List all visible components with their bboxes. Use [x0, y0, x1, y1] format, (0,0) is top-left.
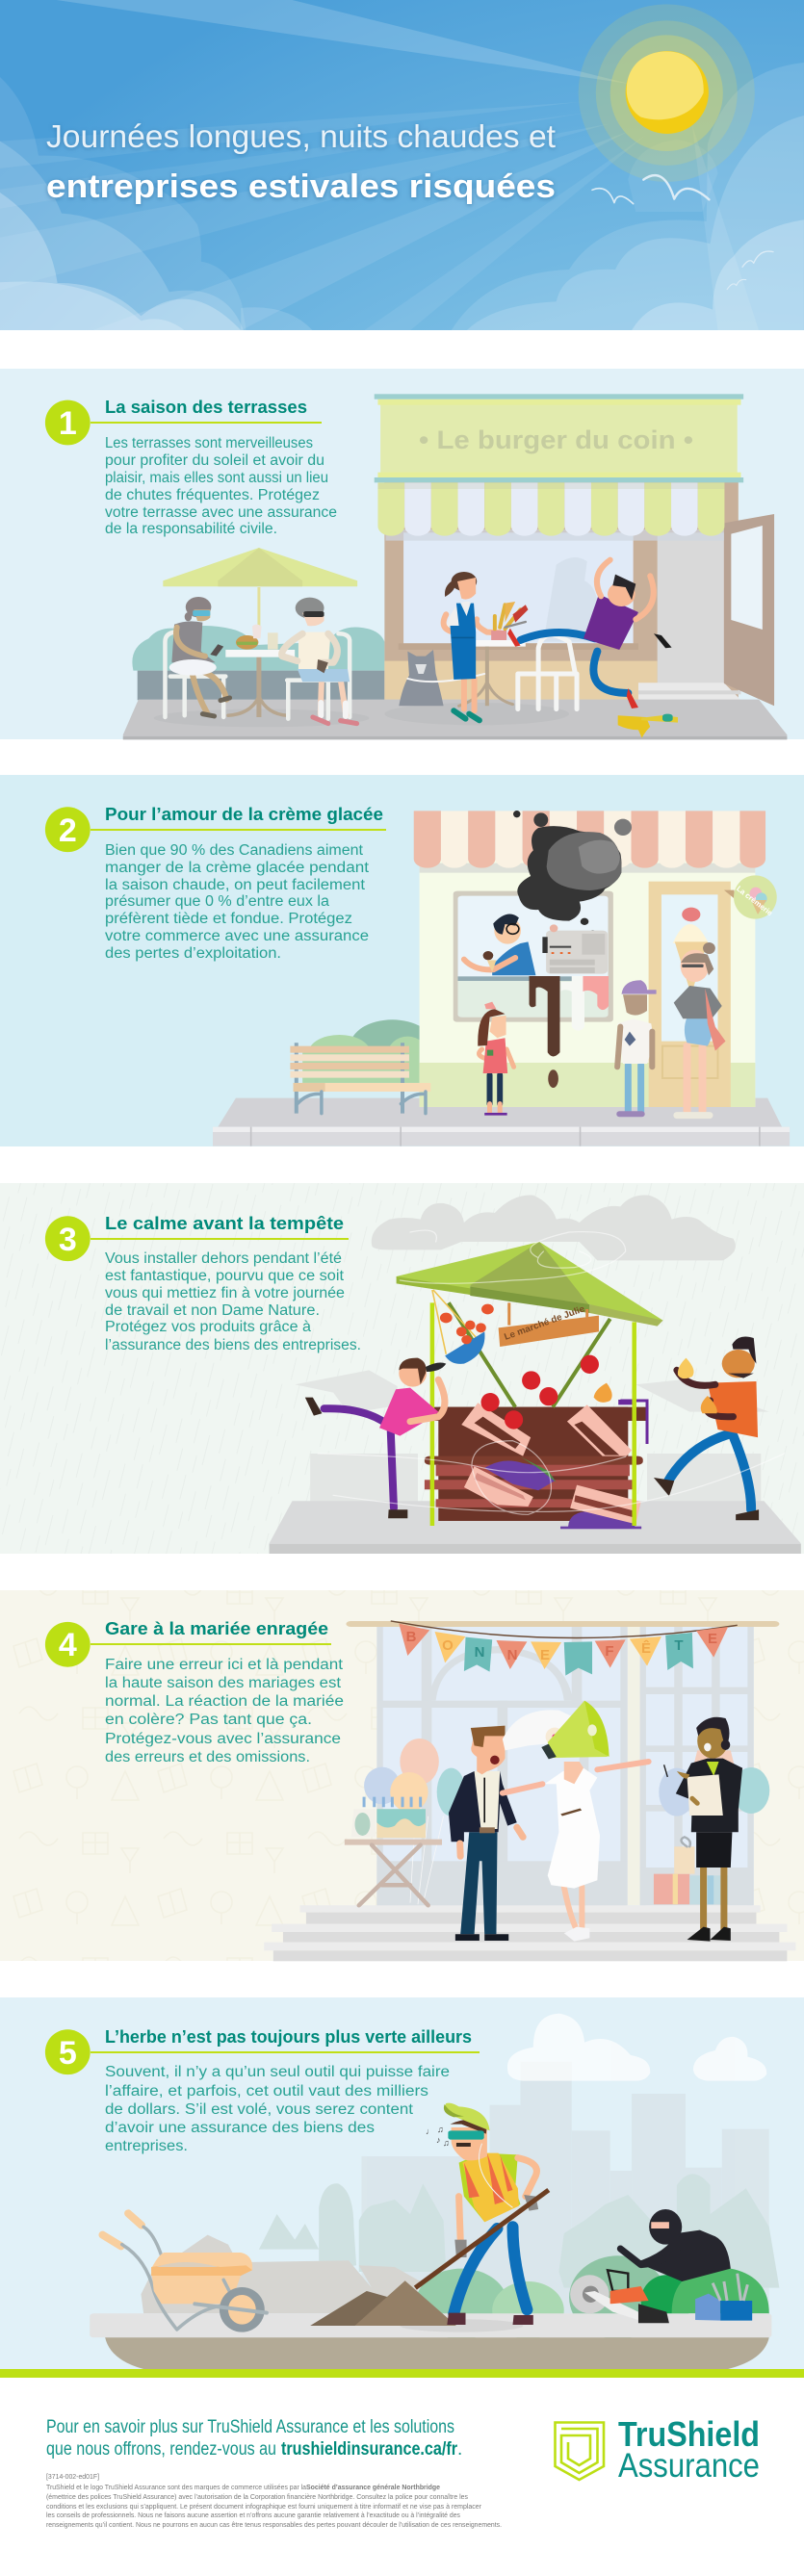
- panel 3: tempête: [0, 1183, 804, 1554]
- bunting letters: E: [708, 1631, 717, 1647]
- number badge 1: [45, 400, 322, 445]
- toolbox: [695, 2274, 752, 2321]
- panel 4: mariée: [0, 1590, 804, 1961]
- thief: [620, 2209, 731, 2281]
- shop building: [384, 481, 774, 706]
- gift boxes: [654, 1837, 728, 1904]
- title: Journées longues, nuits chaudes et: [46, 118, 556, 154]
- sidewalk: [123, 700, 787, 739]
- wordmark: Assurance: [618, 2447, 760, 2485]
- illustration: burger restaurant terrace: [123, 394, 787, 739]
- footer call to action: trushieldinsurance.ca/fr: [281, 2439, 458, 2460]
- footer call to action: .: [457, 2439, 462, 2460]
- shop sign: [375, 394, 743, 482]
- heading 1: La saison des terrasses: [105, 397, 307, 417]
- body text 4: Protégez-vous avec l’assurance: [105, 1731, 341, 1747]
- number badge 1: 1: [59, 405, 77, 442]
- bunting letters: [406, 1629, 717, 1663]
- wordmark: [618, 2414, 760, 2485]
- background trees: [259, 2174, 779, 2288]
- white clouds: [507, 2014, 766, 2081]
- number badge 5: 5: [59, 2035, 77, 2072]
- venue windows: [376, 1627, 754, 1906]
- market sign text: Le marché de Julie: [503, 1303, 586, 1343]
- legal text: conditions et les exclusions qui s’appliquent. Le présent document infographique est fourni uniquement à titre informatif et ne vise pas à remplacer: [46, 2502, 481, 2511]
- music notes: ♫: [437, 2125, 444, 2134]
- body text 4: normal. La réaction de la mariée: [105, 1693, 344, 1710]
- stall poles: [432, 1290, 635, 1526]
- illustration: angry bride at venue: [264, 1621, 795, 1961]
- bench: [290, 1043, 430, 1114]
- body text 5: l’affaire, et parfois, cet outil vaut des milliers: [105, 2083, 428, 2099]
- ground platform: [90, 2313, 771, 2369]
- footer call to action: que nous offrons, rendez-vous au: [46, 2439, 276, 2460]
- canopy: [397, 1242, 663, 1327]
- falling fruit and bowl: [440, 1304, 612, 1430]
- creamery sign text: La crèmerie: [735, 884, 774, 918]
- number badge 3: 3: [59, 1222, 77, 1258]
- sun rays: [0, 0, 759, 330]
- body text 1: de la responsabilité civile.: [105, 521, 277, 537]
- soft-serve machine: [542, 924, 608, 974]
- rocks: [141, 2235, 421, 2313]
- right clouds: [452, 63, 804, 330]
- bushes: [415, 2255, 769, 2339]
- birds: [592, 175, 773, 290]
- panel 1: terrasses: [0, 369, 804, 739]
- customer man: [282, 598, 357, 724]
- body text 3: vous qui mettiez fin à votre journée: [105, 1285, 345, 1301]
- body text 1: Les terrasses sont merveilleuses: [105, 435, 313, 451]
- door: [649, 882, 731, 1107]
- heading 2: Pour l’amour de la crème glacée: [105, 804, 383, 824]
- legal text: renseignements qu’il contient. Nous ne pourrons en aucun cas être tenus responsables des pertes pouvant découler de l’utilisation de ces renseignements.: [46, 2520, 502, 2529]
- sidewalk: [213, 1098, 790, 1146]
- falling customer: [507, 560, 672, 708]
- mustard spill: [618, 714, 678, 738]
- shield icon: [555, 2422, 604, 2480]
- steps: [264, 1905, 795, 1961]
- left clouds: [0, 77, 313, 330]
- title: entreprises estivales risquées: [46, 168, 556, 205]
- cake table: [345, 1797, 442, 1905]
- body text 2: votre commerce avec une assurance: [105, 928, 369, 944]
- creamery round sign: [724, 875, 777, 919]
- body text 2: [105, 842, 370, 962]
- body text 1: [105, 435, 337, 537]
- music notes: ♫: [443, 2138, 450, 2148]
- balloons: [364, 1739, 769, 1904]
- number badge 5: [45, 2029, 480, 2074]
- groom: [449, 1726, 523, 1941]
- bunting letters: T: [674, 1637, 684, 1654]
- number badge 3: [45, 1216, 349, 1261]
- melting ice cream drips: [530, 976, 609, 1088]
- body text 2: manger de la crème glacée pendant: [105, 860, 370, 876]
- body text 1: votre terrasse avec une assurance: [105, 504, 337, 521]
- market sign: [499, 1302, 599, 1347]
- body text 4: Faire une erreur ici et là pendant: [105, 1657, 344, 1673]
- title: [46, 118, 556, 205]
- heading 4: Gare à la mariée enragée: [105, 1618, 328, 1638]
- shop sign text: • Le burger du coin •: [419, 425, 693, 454]
- illustration: landscaper and tool thief: [90, 2014, 779, 2369]
- panel 5: herbe: [0, 1997, 804, 2369]
- bunting letters: N: [507, 1647, 517, 1663]
- body text 5: de dollars. S’il est volé, vous serez content: [105, 2101, 414, 2118]
- panel: hero header: [0, 0, 804, 330]
- body text 4: en colère? Pas tant que ça.: [105, 1712, 312, 1728]
- umbrella: [163, 548, 357, 632]
- grape pile: [560, 1511, 641, 1529]
- body text 3: est fantastique, pourvu que ce soit: [105, 1268, 345, 1284]
- dog: [399, 650, 484, 706]
- shop wall: [420, 860, 755, 1107]
- body text 3: [105, 1250, 361, 1353]
- woman: [674, 942, 725, 1116]
- bunting letters: B: [406, 1629, 417, 1645]
- bushes: [302, 1019, 434, 1083]
- music notes: ♪: [436, 2135, 441, 2145]
- body text 5: [105, 2064, 450, 2154]
- music notes: ♩: [426, 2126, 434, 2136]
- body text 1: plaisir, mais elles sont aussi un lieu: [105, 470, 328, 486]
- vendor: [464, 914, 535, 975]
- stall body: [421, 1400, 647, 1521]
- ground: [270, 1501, 801, 1554]
- number badge 4: 4: [59, 1627, 77, 1663]
- bunting letters: Ê: [641, 1639, 651, 1657]
- stolen saw: [570, 2270, 669, 2323]
- body text 5: Souvent, il n’y a qu’un seul outil qui puisse faire: [105, 2064, 450, 2080]
- number badge 4: [45, 1622, 331, 1667]
- service window: [454, 891, 613, 1022]
- sun: [579, 4, 755, 182]
- music notes: [426, 2125, 450, 2148]
- boy: [617, 980, 657, 1114]
- panel 2: crème glacée: [0, 775, 804, 1146]
- awning: [414, 811, 765, 873]
- green footer divider: [0, 2369, 804, 2378]
- body text 2: des pertes d’exploitation.: [105, 945, 281, 962]
- body text 3: Protégez vos produits grâce à: [105, 1319, 311, 1335]
- legal text: TruShield et le logo TruShield Assurance sont des marques de commerce utilisées par la: [46, 2483, 307, 2491]
- body text 4: des erreurs et des omissions.: [105, 1749, 310, 1765]
- background stalls: [295, 1370, 769, 1502]
- worker: [415, 2103, 549, 2325]
- body text 5: entreprises.: [105, 2138, 188, 2154]
- waitress: [444, 572, 528, 720]
- bunting letters: N: [475, 1644, 484, 1661]
- dirt pile: [310, 2280, 456, 2326]
- legal text: Société d’assurance générale Northbridge: [306, 2483, 440, 2491]
- legal text: [3714-002-ed01F]: [46, 2472, 99, 2481]
- number badge 2: [45, 807, 386, 852]
- awning: [377, 482, 724, 541]
- wordmark: TruShield: [618, 2414, 760, 2454]
- body text 1: de chutes fréquentes. Protégez: [105, 487, 320, 503]
- bunting: [391, 1621, 738, 1676]
- wheelbarrow: [102, 2213, 267, 2332]
- bride: [503, 1701, 649, 1942]
- body text 3: Vous installer dehors pendant l’été: [105, 1250, 342, 1267]
- heading 3: Le calme avant la tempête: [105, 1213, 344, 1233]
- wind swirls: [318, 1230, 785, 1514]
- illustration: ice cream shop: [213, 811, 790, 1146]
- footer call to action: [46, 2417, 462, 2460]
- body text 4: [105, 1657, 344, 1765]
- legal text: les conseils de professionnels. Nous ne faisons aucune assertion et n’offrons aucune garantie relativement à l’exactitude ou à l’intégralité des: [46, 2511, 460, 2519]
- second table and chair: [459, 635, 577, 709]
- customer woman: [165, 597, 230, 717]
- body text 1: pour profiter du soleil et avoir du: [105, 452, 324, 469]
- footer call to action: Pour en savoir plus sur TruShield Assurance et les solutions: [46, 2417, 454, 2437]
- legal text: [46, 2472, 502, 2529]
- illustration: market stall in a storm: [270, 1195, 801, 1554]
- body text 2: Bien que 90 % des Canadiens aiment: [105, 842, 364, 859]
- body text 2: présumer que 0 % d’entre eux la: [105, 893, 329, 910]
- beam: [346, 1621, 779, 1627]
- crates: [461, 1403, 641, 1524]
- skyline: [361, 2062, 769, 2313]
- woman running: [305, 1358, 446, 1518]
- cafe table and food: [225, 625, 295, 717]
- bunting letters: F: [605, 1643, 614, 1660]
- sky illustration: rays, clouds, sun and birds: [0, 0, 804, 330]
- legal text: (émettrice des polices TruShield Assurance) avec l’autorisation de la Corporation financière Northbridge. Consultez la police pour connaître les: [46, 2492, 468, 2501]
- man catching pears: [654, 1336, 759, 1520]
- number badge 2: 2: [59, 812, 77, 849]
- hedge and planter: [132, 626, 384, 700]
- body text 5: d’avoir une assurance des biens des: [105, 2120, 375, 2136]
- body text 3: l’assurance des biens des entreprises.: [105, 1337, 361, 1353]
- bunting letters: E: [540, 1647, 550, 1663]
- TruShield logo: [555, 2414, 760, 2485]
- bunting letters: O: [442, 1637, 454, 1654]
- smoke cloud: [513, 811, 632, 935]
- storm clouds: [372, 1195, 736, 1260]
- wedding planner: [664, 1717, 742, 1942]
- body text 4: la haute saison des mariages est: [105, 1675, 342, 1691]
- heading 5: L’herbe n’est pas toujours plus verte ailleurs: [105, 2026, 472, 2047]
- body text 3: de travail et non Dame Nature.: [105, 1302, 320, 1319]
- girl: [478, 1002, 514, 1116]
- body text 2: la saison chaude, on peut facilement: [105, 877, 366, 893]
- body text 2: préfèrent tiède et fondue. Protégez: [105, 911, 352, 927]
